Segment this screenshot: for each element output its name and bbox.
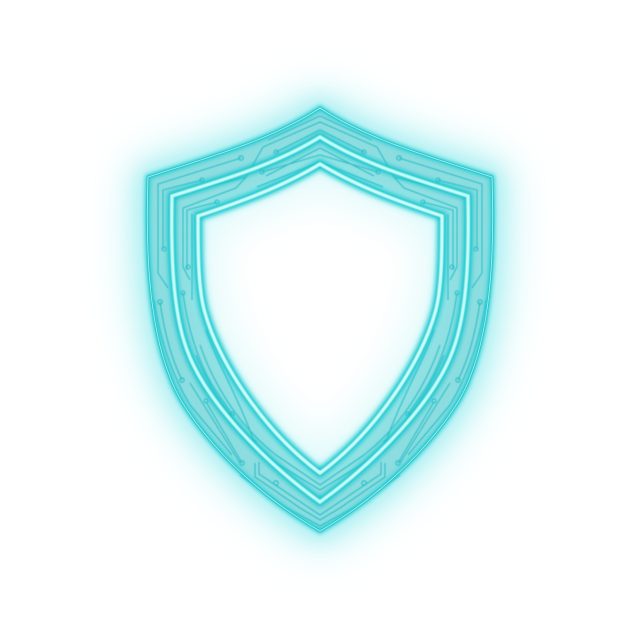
- inner neon line: [198, 164, 442, 473]
- wide faint halo: [147, 108, 493, 531]
- shield band: [147, 108, 493, 531]
- middle neon line: [172, 137, 468, 502]
- inner white area glow: [198, 164, 442, 473]
- circuit traces: [154, 116, 486, 526]
- outer neon line: [147, 108, 493, 531]
- outer glow: [147, 108, 493, 531]
